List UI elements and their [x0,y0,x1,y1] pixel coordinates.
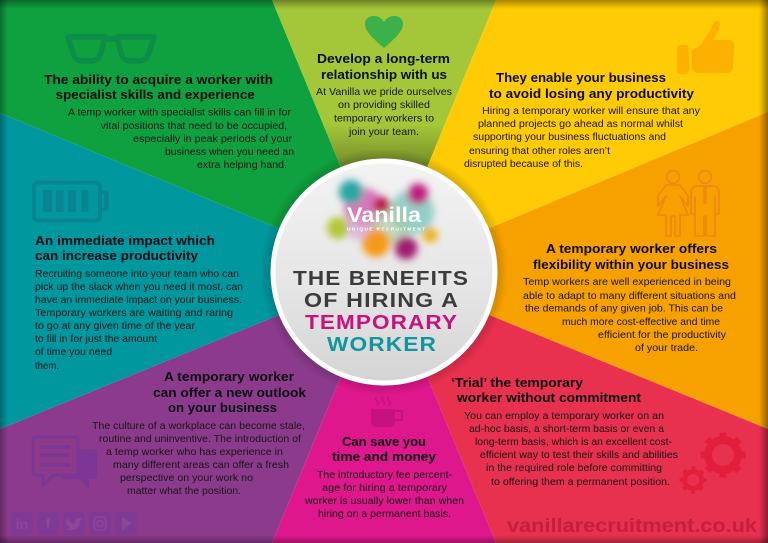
text: trial without commitment: efficient way to test their skills and abilities [480,449,678,461]
text: avoid losing productivity: ensuring that other roles aren’t [469,145,610,157]
text: immediate impact [35,268,243,372]
heading: flexibility: A temporary worker offers [546,242,717,256]
heading: new outlook: A temporary worker [164,370,294,384]
panel: long-term relationship [272,0,496,272]
heading: specialist skills: The ability to acquire a worker with [44,73,273,87]
text: trial without commitment: in the required role before committing [486,462,662,474]
text: immediate impact: them. [35,360,59,372]
text: specialist skills: A temp worker with specialist skills can fill in for [68,106,292,118]
logo: Vanilla colour blobs [327,180,438,260]
heading: time and money: time and money [332,450,436,464]
social media icons: f [46,516,52,533]
text: immediate impact: Temporary workers are waiting and raring [35,307,233,319]
text: flexibility: Temp workers are well experienced in being [523,276,731,288]
text: long-term relationship: At Vanilla we pride ourselves [316,86,452,98]
title: OF HIRING A [304,289,459,312]
heading: trial without commitment [451,376,642,405]
panel: trial without commitment [384,272,768,543]
icon: coffee cup [371,397,402,427]
heading: trial without commitment: ‘Trial’ the temporary [451,376,583,390]
panel: new outlook [0,272,384,543]
panel: time and money [272,272,496,543]
text: flexibility: of your trade. [635,342,698,354]
title [293,267,469,356]
text: avoid losing productivity: planned projects go ahead as normal whilst [478,118,683,130]
text: immediate impact: of time you need [35,346,112,358]
text: time and money [304,469,464,520]
text: avoid losing productivity: supporting your business fluctuations and [473,131,666,143]
icon: heart [365,16,403,48]
heading: long-term relationship: relationship with us [321,68,447,82]
heading: trial without commitment: worker without commitment [456,391,642,405]
text: flexibility: efficient for the productivity [598,329,727,341]
logo: Vanilla colour blobs: UNIQUE RECRUITMENT [347,226,425,232]
heading: long-term relationship: Develop a long-term [317,52,450,66]
text: flexibility [523,276,736,354]
text: specialist skills: vital positions that need to be occupied, [101,120,287,132]
text: new outlook: a temp worker who has experience in [106,446,283,458]
heading: avoid losing productivity: to avoid losing any productivity [489,87,694,101]
heading: time and money: Can save you [342,435,426,449]
heading: specialist skills: specialist skills and experience [56,88,255,102]
panel: specialist skills [0,0,384,272]
text: avoid losing productivity [464,105,701,170]
text: immediate impact: pick up the slack when you need it most, can [35,281,243,293]
text: new outlook: The culture of a workplace can become stale, [92,420,305,432]
heading: long-term relationship [317,52,450,82]
text: immediate impact: Recruiting someone into your team who can [35,268,239,280]
heading: flexibility: flexibility within your business [533,258,729,272]
text: avoid losing productivity: Hiring a temporary worker will ensure that any [482,105,701,117]
text: new outlook: many different areas can offer a fresh [113,459,289,471]
heading: avoid losing productivity: They enable your business [496,71,666,85]
panel: immediate impact [0,113,384,429]
social media icons: in [16,516,28,532]
text: immediate impact: to go at any given time of the year [35,320,195,332]
website address: vanillarecruitment.co.uk [507,516,757,537]
icon: glasses [68,37,154,61]
heading: specialist skills [44,73,273,102]
text: long-term relationship [316,86,452,138]
text: new outlook: matter what the position. [127,485,241,497]
text: new outlook: perspective on your work no [120,472,253,484]
logo: Vanilla colour blobs: Vanilla [347,204,421,227]
heading: new outlook: on your business [168,401,277,415]
icon: woman and man [658,171,719,236]
title: WORKER [327,333,437,356]
text: immediate impact: to fill in for just the amount [35,333,157,345]
text: flexibility: the demands of any given job. This can be [525,302,723,314]
heading: time and money [332,435,436,464]
panel: flexibility [384,112,768,429]
text: long-term relationship: temporary workers to [334,112,434,124]
text: flexibility: much more cost-effective and time [562,316,720,328]
text: time and money: worker is usually lower than when [304,495,464,507]
central title disc [273,161,495,383]
heading: immediate impact: An immediate impact which [35,234,215,248]
heading: avoid losing productivity [489,71,694,101]
icon: gears [682,435,743,492]
title: TEMPORARY [305,311,458,334]
text: long-term relationship: join your team. [348,126,419,138]
text: flexibility: able to adapt to many different situations and [523,290,736,302]
heading: new outlook: can offer a new outlook [153,386,306,400]
icon: battery [34,182,109,220]
icon: thumbs up [677,21,734,74]
panel: avoid losing productivity [384,0,768,272]
text: trial without commitment: You can employ a temporary worker on an [464,410,664,422]
text: time and money: age for hiring a temporary [322,482,448,494]
text: new outlook [92,420,305,497]
text: trial without commitment [464,410,678,488]
text: new outlook: routine and uninventive. The introduction of [99,433,301,445]
social media icons [11,512,137,535]
text: specialist skills [68,106,294,171]
text: time and money: The introductory fee percent- [317,469,452,481]
text: avoid losing productivity: disrupted because of this. [464,158,583,170]
text: specialist skills: extra helping hand. [197,159,287,171]
heading: immediate impact: can increase productivity [35,249,198,263]
text: trial without commitment: ad-hoc basis, a short-term basis or even a [469,423,664,435]
text: immediate impact: have an immediate impact on your business. [35,294,242,306]
text: specialist skills: especially in peak periods of your [133,133,293,145]
heading: new outlook [153,370,306,415]
icon: speech bubbles [33,437,97,489]
text: time and money: hiring on a permanent basis. [318,508,451,520]
text: specialist skills: business when you need an [165,146,294,158]
title: THE BENEFITS [293,267,469,290]
text: trial without commitment: long-term basis, which is an excellent cost- [475,436,672,448]
heading: flexibility [533,242,729,272]
text: trial without commitment: to offering them a permanent position. [491,476,670,488]
text: long-term relationship: on providing skilled [338,99,430,111]
heading: immediate impact [35,234,215,263]
